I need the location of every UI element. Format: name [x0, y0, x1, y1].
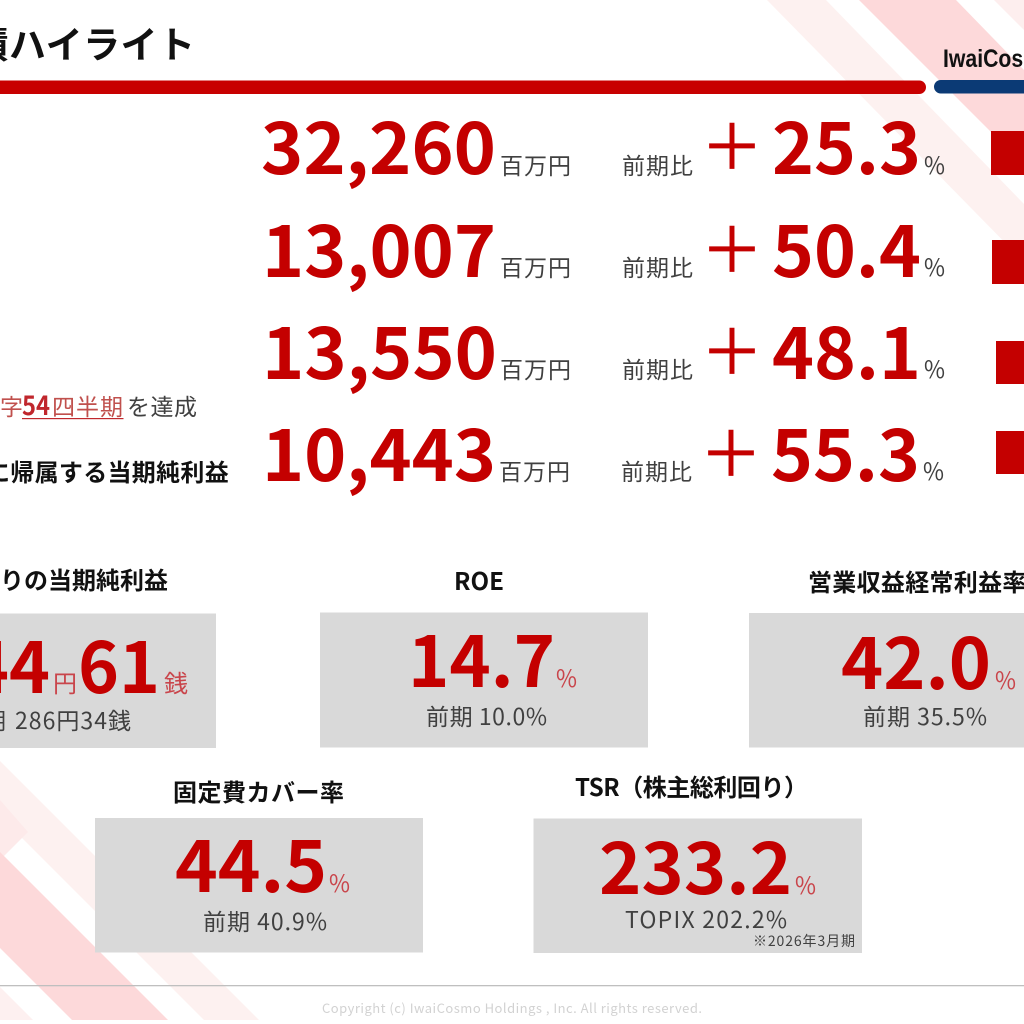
panel: TSR: TOPIX 202.2% — [625, 901, 787, 935]
row 4: net profit: 10,443 — [262, 400, 496, 502]
row 2: operating profit: ＋ — [701, 200, 763, 290]
panel: EPS: 円 — [53, 664, 77, 699]
panel: operating margin: 営業収益経常利益率 — [808, 563, 1024, 598]
row 3: ordinary profit: % — [924, 350, 945, 385]
row 4: net profit: 百万円 — [499, 453, 570, 487]
panel: TSR: TSR（株主総利回り） — [575, 768, 808, 803]
row 4: net profit: 前期比 — [621, 453, 692, 487]
panel: TSR: 233.2 — [599, 813, 792, 915]
panel: EPS — [0, 561, 216, 748]
background stripes: top right — [767, 0, 1024, 262]
row 4: net profit: ＋ — [700, 404, 762, 494]
row 1: operating revenue: 百万円 — [500, 147, 571, 181]
panel: TSR — [534, 768, 862, 953]
panel: ROE: 14.7 — [408, 606, 555, 708]
panel: operating margin: 42.0 — [841, 608, 991, 710]
row 1: operating revenue: 32,260 — [261, 93, 496, 195]
panel: ROE: % — [556, 659, 577, 694]
row 3: ordinary profit: 13,550 — [262, 298, 497, 400]
row 2: operating profit: % — [924, 248, 945, 283]
row 1: operating revenue: ＋ — [701, 97, 763, 187]
row 3: ordinary profit — [262, 298, 1024, 400]
panel: TSR: ※2026年3月期 — [753, 931, 855, 951]
row 2: operating profit: 前期比 — [622, 249, 693, 283]
row 3: ordinary profit: 百万円 — [500, 351, 571, 385]
footer divider — [0, 985, 1024, 986]
row 3 note: consecutive profit quarters — [0, 386, 197, 423]
row 3 note: consecutive profit quarters: 54 — [22, 386, 50, 423]
panel: EPS: 286円34銭 — [15, 702, 131, 736]
panel: operating margin: % — [995, 661, 1016, 696]
row 2: operating profit — [262, 196, 1024, 298]
panel: EPS: 61 — [78, 612, 160, 714]
row 3 note: consecutive profit quarters: を達成 — [127, 388, 197, 422]
row 1: operating revenue: 25.3 — [772, 93, 921, 195]
header bar navy — [934, 80, 1024, 94]
row 1: operating revenue: % — [924, 146, 945, 181]
row 4: net profit — [262, 400, 1024, 502]
panel: fixed cost coverage: 前期 40.9% — [203, 903, 327, 937]
footer copyright: Copyright (c) IwaiCosmo Holdings , Inc. All rights reserved. — [322, 998, 702, 1017]
row 4: net profit: 55.3 — [771, 400, 920, 502]
panel: fixed cost coverage — [95, 773, 423, 952]
panel: operating margin: 前期 35.5% — [863, 698, 987, 732]
row 3: ordinary profit: 48.1 — [772, 298, 921, 400]
panel: ROE — [320, 562, 648, 748]
row 4: net profit: % — [923, 452, 944, 487]
row 3: ordinary profit: ＋ — [701, 302, 763, 392]
panel: EPS: 銭 — [164, 664, 188, 699]
panel: fixed cost coverage: % — [329, 864, 350, 899]
row 2: operating profit: 50.4 — [772, 196, 921, 298]
panel: operating margin — [749, 563, 1024, 748]
background stripes: bottom left — [0, 761, 259, 1020]
row 2: operating profit: 13,007 — [262, 196, 496, 298]
panel: ROE: 前期 10.0% — [426, 698, 547, 732]
header bar red — [0, 80, 926, 94]
panel: TSR: % — [795, 866, 816, 901]
row 3: ordinary profit: 前期比 — [622, 351, 693, 385]
row 1: operating revenue: 前期比 — [622, 147, 693, 181]
panel: fixed cost coverage: 固定費カバー率 — [173, 773, 344, 808]
row 3 note: consecutive profit quarters: 四半期 — [52, 388, 123, 422]
row 1: operating revenue — [261, 93, 1024, 195]
panel: fixed cost coverage: 44.5 — [175, 811, 327, 913]
row 2: operating profit: 百万円 — [500, 249, 571, 283]
panel: ROE: ROE — [454, 562, 504, 597]
